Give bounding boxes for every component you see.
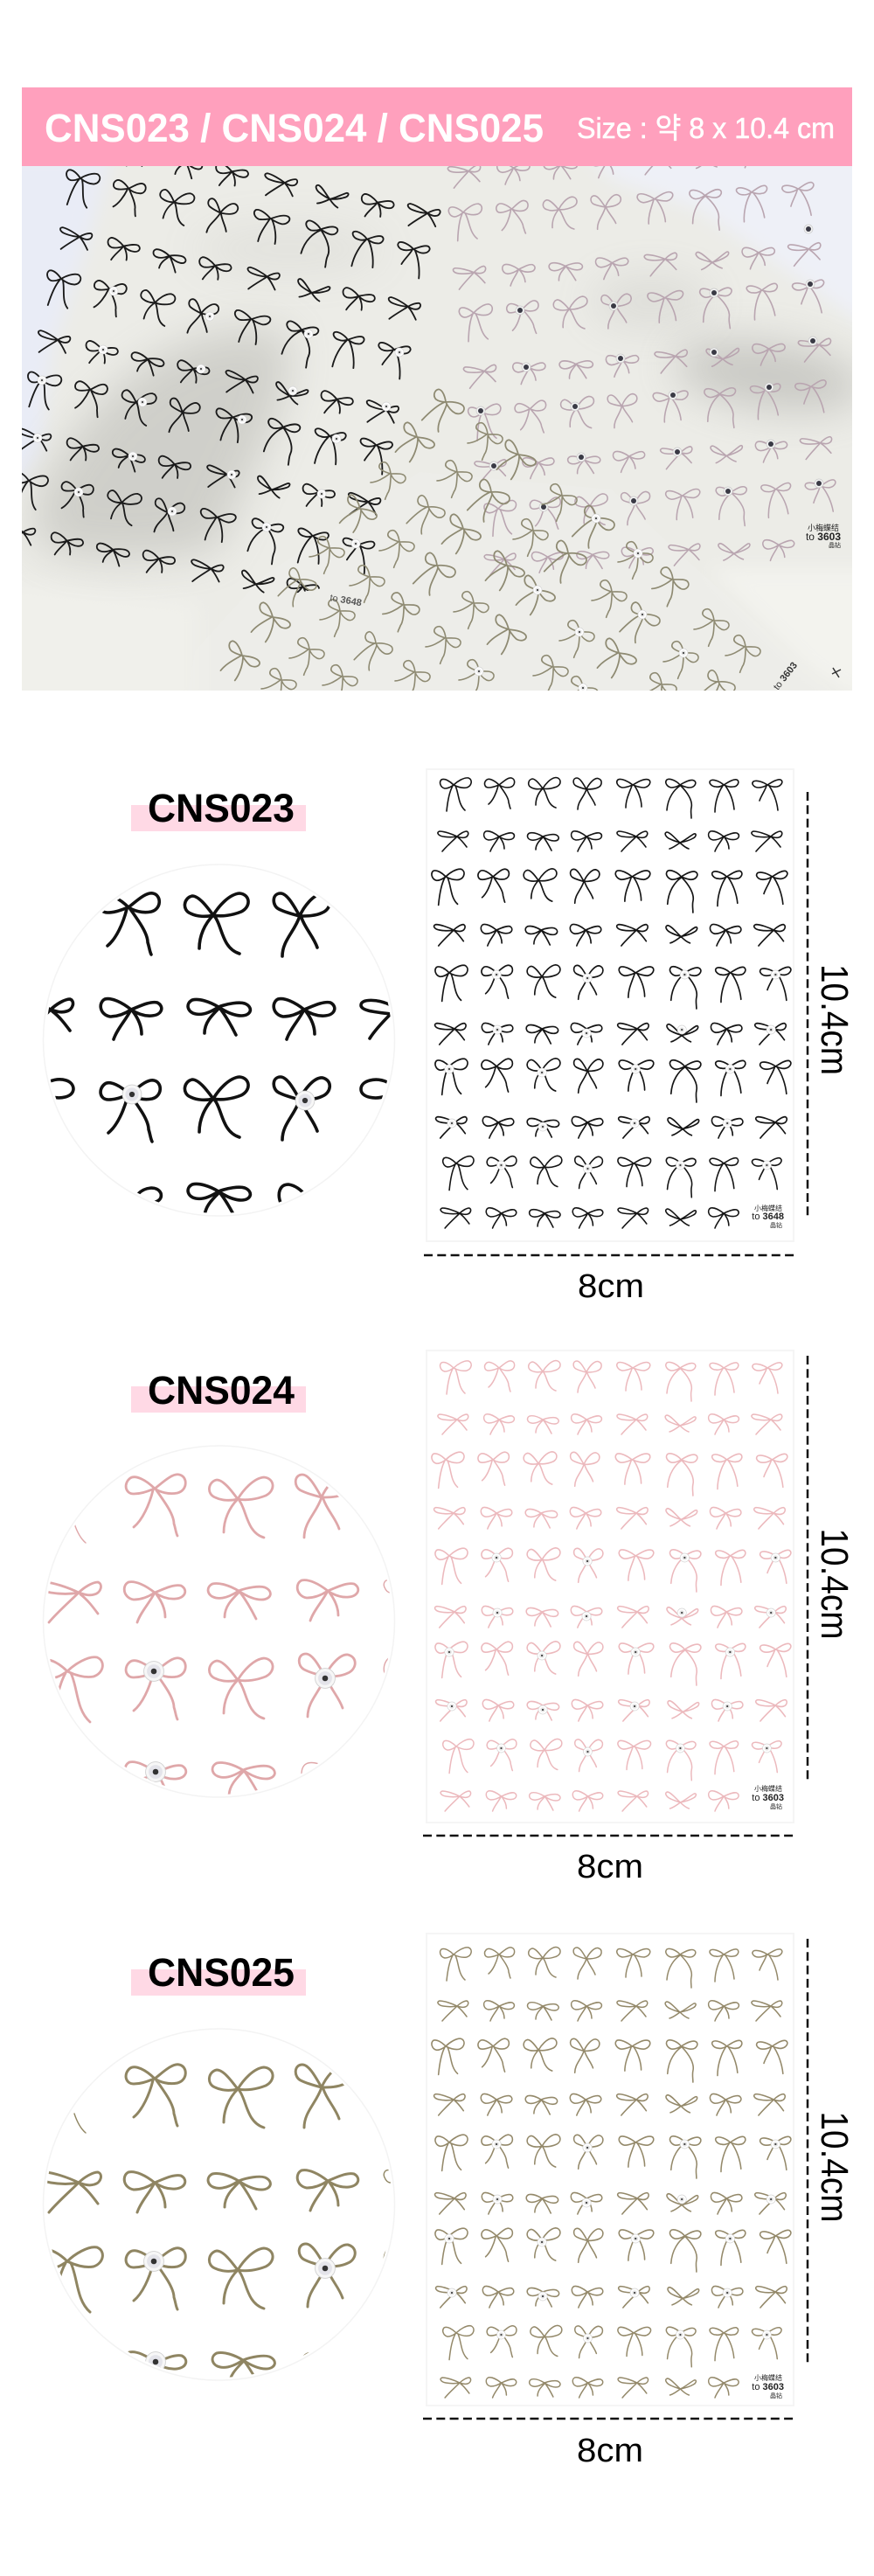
sheet code label <box>752 2373 784 2399</box>
heading: CNS023: CNS023 <box>148 786 295 830</box>
width label: 8cm <box>578 1268 644 1305</box>
height dimension line <box>807 1356 808 1782</box>
sheet code label: 小梅蝶结 <box>754 1204 782 1212</box>
height label: 10.4cm <box>813 964 856 1075</box>
sheet label in photo: to 3603: to 3603 <box>806 531 841 543</box>
sheet label in photo: to 3603 <box>806 523 841 549</box>
sheet code label: to 3603 <box>752 2382 784 2392</box>
circle close-up: pink bows <box>40 1446 395 1802</box>
height label: 10.4cm <box>813 2112 856 2222</box>
sheet code label: 晶钻 <box>770 1802 782 1810</box>
sheet code label: 晶钻 <box>770 1221 782 1229</box>
width dimension line <box>423 2418 796 2420</box>
gold sticker sheet in photo <box>213 387 762 716</box>
sheet code label: to 3648 <box>752 1212 784 1222</box>
photo: three bow sticker sheets <box>22 166 852 691</box>
circle close-up: black bows <box>12 864 395 1219</box>
heading: CNS024: CNS024 <box>148 1368 295 1413</box>
width dimension line <box>423 1835 796 1837</box>
height dimension line <box>807 792 808 1219</box>
black sticker sheet in photo <box>22 166 441 594</box>
sticker sheet: gold <box>427 1934 794 2406</box>
sheet code label: 小梅蝶结 <box>754 1784 782 1793</box>
sticker sheet: pink <box>427 1350 794 1823</box>
height dimension line <box>807 1939 808 2365</box>
section: CNS025 <box>40 1934 856 2469</box>
width label: 8cm <box>577 2433 643 2469</box>
product codes heading: CNS023 / CNS024 / CNS025 <box>45 106 544 150</box>
sheet label in photo: rotated to 3603: to 3603 <box>772 661 800 692</box>
sheet corner mark in photo <box>832 668 841 677</box>
sticker sheet: black <box>427 769 794 1241</box>
title banner <box>22 87 852 166</box>
sheet label in photo: to 3603: 晶钻 <box>829 541 841 549</box>
width dimension line <box>424 1254 796 1256</box>
heading: CNS025: CNS025 <box>148 1950 295 1995</box>
sheet code label <box>752 1204 784 1229</box>
sheet code label: to 3603 <box>752 1793 784 1803</box>
section: CNS023 <box>12 769 856 1305</box>
sheet code label: 晶钻 <box>770 2392 782 2399</box>
width label: 8cm <box>577 1849 643 1885</box>
section: CNS024 <box>40 1350 856 1885</box>
height label: 10.4cm <box>813 1528 856 1640</box>
sheet label in photo: to 3648: to 3648 <box>329 593 363 608</box>
size text: Size : 약 8 x 10.4 cm <box>577 112 835 144</box>
sheet label in photo: to 3603: 小梅蝶结 <box>808 523 839 532</box>
circle close-up: gold bows <box>40 2029 395 2392</box>
sheet code label <box>752 1784 784 1810</box>
pink sticker sheet in photo <box>447 141 838 575</box>
sheet code label: 小梅蝶结 <box>754 2373 782 2382</box>
